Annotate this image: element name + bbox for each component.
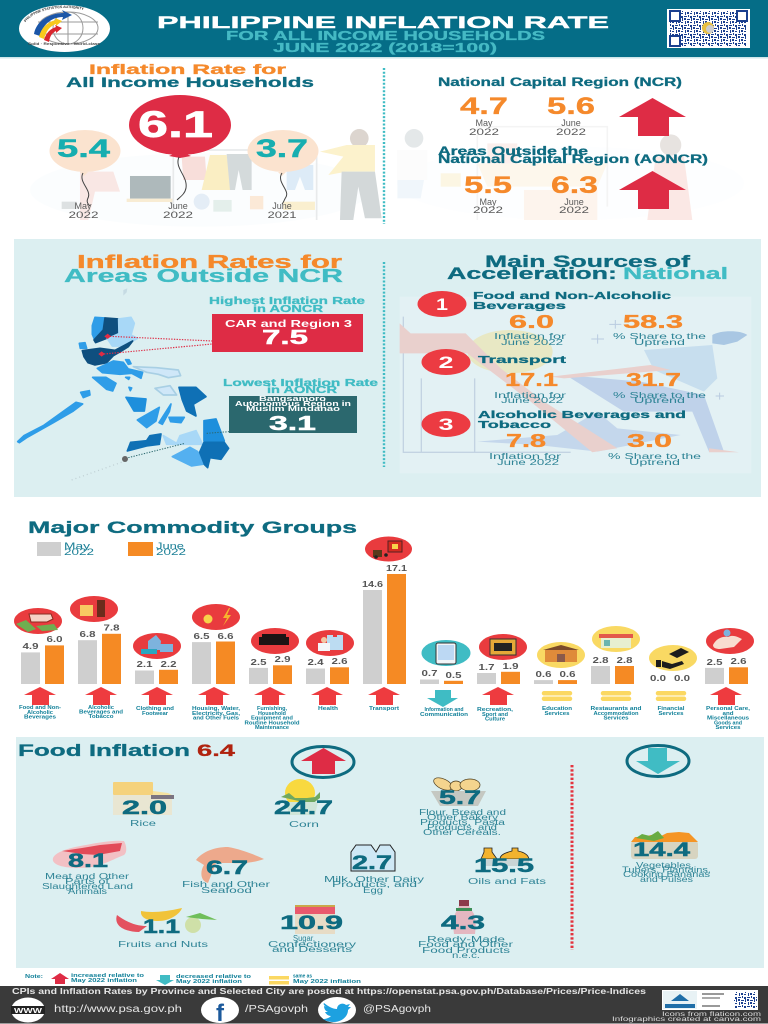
item: oils and fats: Oils and Fats: [468, 877, 546, 886]
panel: NCR and AONCR: [397, 75, 744, 220]
item: milk: Products, and: [332, 880, 417, 889]
group: furnishing: 2.5: [250, 658, 267, 667]
source 1: food: Beverages: [473, 300, 566, 312]
group: health: [306, 630, 354, 712]
source 1: food: Inflation for: [494, 332, 567, 341]
source 1: food: % Share to the: [613, 332, 707, 341]
item: sugar: and Desserts: [272, 945, 352, 954]
map of the Philippines: [18, 288, 229, 480]
group: food and non-alcoholic beverages: Alcoholic: [27, 710, 53, 716]
source 2: transport: June 2022: [501, 396, 564, 405]
group: information and communication: Communication: [420, 712, 468, 718]
group: information and communication: 0.5: [446, 671, 462, 680]
item: flour and bread: 5.7: [439, 788, 481, 809]
group: food and non-alcoholic beverages: [14, 608, 64, 720]
item: corn: [274, 779, 333, 829]
subtitle: [226, 28, 546, 55]
legend note: May 2022 inflation: [71, 978, 137, 984]
group: clothing and footwear: 2.1: [136, 660, 153, 669]
source 2: transport: Uptrend: [634, 396, 685, 405]
faded shopping illustration: [30, 129, 382, 227]
group: recreation, sport and culture: Culture: [485, 716, 505, 722]
AONCR May value: [464, 172, 512, 215]
item: oils and fats: [468, 848, 546, 886]
group: clothing and footwear: [133, 633, 181, 717]
item: ready-made food: n.e.c.: [452, 951, 480, 960]
heading: Inflation Rate for: [89, 61, 287, 77]
item: milk: Egg: [363, 886, 383, 895]
item: meat: [42, 841, 133, 896]
item: fish: Fish and Other: [182, 880, 271, 889]
heading: [66, 61, 314, 90]
source 3: alcoholic beverages: [422, 409, 702, 467]
group: transport: 14.6: [362, 580, 384, 589]
group: restaurants and accommodation: Restaurants and: [590, 706, 642, 712]
AONCR May value: May: [479, 197, 497, 207]
source 2: transport: 2: [438, 353, 454, 372]
item: fish: 6.7: [206, 858, 248, 879]
source 1: food: 58.3: [623, 312, 683, 332]
footer note: CPIs and Inflation Rates by Province and Selected City are posted at https://openstat.psa.gov.ph/Database/Prices/Price-Indices: [12, 987, 647, 996]
group: personal care: Goods and: [714, 720, 742, 726]
group: transport: 17.1: [386, 564, 408, 573]
callout: lowest inflation: [223, 377, 378, 435]
callout: lowest inflation: Autonomous Region in: [235, 401, 351, 408]
heading: main sources: Acceleration:: [447, 265, 617, 283]
item: rice: 2.0: [122, 798, 167, 819]
NCR June value: June: [561, 118, 581, 128]
item: flour and bread: Products, and: [427, 823, 497, 832]
group: health: Health: [318, 706, 338, 712]
panel: food inflation: [16, 737, 764, 968]
subtitle: JUNE 2022 (2018=100): [273, 40, 497, 55]
source 1: food: Food and Non-Alcoholic: [473, 290, 671, 302]
group: restaurants and accommodation: 2.8: [616, 656, 633, 665]
group: food and non-alcoholic beverages: Food and Non-: [19, 705, 61, 711]
item: fruits and nuts: [116, 908, 217, 949]
heading: food inflation: [18, 741, 236, 760]
legend note: Note:: [25, 974, 43, 980]
heading: All Income Households: [66, 74, 314, 90]
group: personal care: 2.5: [706, 658, 723, 667]
group: housing, water, electricity: [192, 604, 241, 722]
group: personal care: 2.6: [730, 657, 747, 666]
group: recreation, sport and culture: [477, 634, 527, 722]
source 1: food: [418, 290, 707, 347]
icon: twitter: [318, 997, 356, 1023]
heading: main sources: [447, 253, 728, 283]
group: information and communication: 0.7: [422, 669, 438, 678]
AONCR June value: 6.3: [551, 172, 598, 199]
item: meat: Meat and Other: [45, 872, 129, 881]
NCR May value: [460, 93, 508, 137]
balloon: June 2022: June: [168, 201, 188, 211]
group: information and communication: [420, 640, 470, 718]
item: flour and bread: Other Cereals.: [423, 828, 501, 837]
PSA logo: PHILIPPINE STATISTICS AUTHORITY: [24, 6, 84, 22]
group: housing, water, electricity: 6.6: [218, 632, 234, 641]
panel: all income households: [30, 61, 382, 227]
certification badge: [662, 990, 758, 1010]
callout: lowest inflation: in AONCR: [267, 384, 338, 396]
source 3: alcoholic beverages: Uptrend: [629, 458, 680, 467]
legend note: May 2022 inflation: [293, 979, 361, 985]
arrow: NCR up: [619, 98, 686, 136]
NCR May value: 2022: [469, 127, 499, 137]
source 3: alcoholic beverages: Inflation for: [489, 452, 562, 461]
NCR May value: 4.7: [460, 93, 508, 120]
icon: up arrow in circle: [292, 746, 354, 778]
icon: facebook: [201, 997, 239, 1024]
balloon: June 2022: 6.1: [138, 104, 213, 145]
item: vegetables: Cooking Bananas: [623, 870, 710, 879]
item: sugar: Confectionery: [268, 940, 356, 949]
item: ready-made food: 4.3: [441, 913, 485, 934]
group: furnishing: Furnishing,: [257, 706, 288, 712]
heading: main sources: Main Sources of: [485, 253, 691, 271]
item: flour and bread: Products, Pasta: [420, 818, 506, 827]
AONCR May value: 5.5: [464, 172, 512, 199]
group: housing, water, electricity: 6.5: [194, 632, 210, 641]
group: alcoholic beverages and tobacco: Alcoholic: [88, 705, 114, 711]
group: transport: [362, 536, 412, 712]
item: sugar: 10.9: [280, 913, 343, 934]
group: alcoholic beverages and tobacco: Beverages and: [79, 710, 123, 716]
callout: highest inflation: CAR and Region 3: [225, 318, 352, 330]
arrow: AONCR up: [619, 171, 686, 209]
footer: [0, 986, 768, 1024]
group: alcoholic beverages and tobacco: 6.8: [80, 630, 96, 639]
source 3: alcoholic beverages: June 2022: [497, 458, 560, 467]
group: health: 2.4: [308, 658, 324, 667]
group: furnishing: Equipment and: [251, 716, 293, 722]
faded market illustration: [397, 127, 744, 220]
item: vegetables: Vegetables,: [636, 861, 694, 870]
group: housing, water, electricity: Electricity, Gas,: [192, 711, 241, 717]
group: recreation, sport and culture: 1.7: [478, 663, 495, 672]
group: financial services: Financial: [658, 706, 685, 712]
group: clothing and footwear: Clothing and: [136, 706, 174, 712]
balloon: June 2021: 3.7: [256, 135, 308, 163]
source 3: alcoholic beverages: 3.0: [627, 431, 672, 451]
balloon: May 2022: 2022: [68, 210, 98, 220]
group: furnishing: Maintenance: [255, 725, 289, 731]
group: education services: [534, 642, 585, 717]
group: financial services: Services: [658, 711, 684, 717]
bar chart: commodity groups: [14, 536, 754, 731]
balloon: May 2022: May: [74, 201, 92, 211]
group: education services: Education: [542, 706, 572, 712]
item: milk: 2.7: [352, 853, 392, 874]
icon: website: WWW: [14, 1008, 43, 1015]
credits: [612, 1011, 761, 1023]
chart legend: May: [64, 541, 91, 551]
heading: food inflation: 6.4: [197, 741, 236, 760]
group: food and non-alcoholic beverages: 4.9: [22, 642, 39, 651]
group: clothing and footwear: Footwear: [142, 711, 168, 717]
group: education services: Services: [544, 711, 570, 717]
item: sugar: Sugar,: [293, 934, 315, 943]
item: vegetables: Tubers, Plantains,: [622, 866, 711, 874]
group: information and communication: Information and: [424, 707, 464, 713]
NCR June value: [547, 93, 595, 137]
group: housing, water, electricity: Housing, Water,: [192, 706, 241, 712]
heading: main sources: National: [623, 265, 728, 283]
source 2: transport: 31.7: [626, 370, 681, 390]
source 1: food: Uptrend: [634, 338, 685, 347]
item: meat: Parts of: [65, 877, 110, 886]
twitter handle: @PSAgovph: [363, 1004, 431, 1015]
group: transport: Transport: [369, 706, 399, 712]
callout: lowest inflation: Lowest Inflation Rate: [223, 377, 378, 389]
item: vegetables: [622, 831, 711, 884]
item: milk: [324, 845, 424, 895]
source 3: alcoholic beverages: % Share to the: [608, 452, 702, 461]
PSA logo: [19, 5, 110, 52]
callout: highest inflation: Highest Inflation Rate: [209, 295, 365, 307]
item: ready-made food: Food and Other: [418, 940, 514, 949]
group: alcoholic beverages and tobacco: 7.8: [104, 624, 120, 632]
group: alcoholic beverages and tobacco: Tobacco: [88, 714, 114, 720]
item: flour and bread: Other Bakery: [427, 813, 498, 822]
item: corn: Corn: [289, 820, 319, 829]
legend note: increased relative to: [71, 973, 144, 979]
callout: highest inflation: 7.5: [262, 327, 308, 349]
group: restaurants and accommodation: Services: [604, 716, 629, 722]
AONCR June value: [551, 172, 598, 215]
group: alcoholic beverages and tobacco: [70, 596, 123, 720]
group: financial services: [649, 645, 697, 717]
item: fish: [182, 847, 271, 895]
legend note: May 2022 inflation: [176, 979, 242, 985]
AONCR heading: Areas Outside the: [438, 144, 588, 158]
header banner: [0, 0, 768, 58]
item: rice: Rice: [130, 819, 157, 828]
source 3: alcoholic beverages: 3: [438, 415, 454, 434]
credits: Icons from flaticon.com: [662, 1011, 761, 1018]
balloon: June 2021: June: [272, 201, 292, 211]
group: recreation, sport and culture: Sport and: [482, 712, 508, 718]
chart legend: [37, 541, 186, 557]
AONCR June value: June: [564, 197, 584, 207]
faded runner illustration: [400, 297, 751, 473]
item: flour and bread: Flour, Bread and: [419, 808, 506, 817]
callout: lowest inflation: Muslim Mindanao: [246, 406, 340, 413]
icon: website: [11, 998, 45, 1022]
AONCR heading: National Capital Region (AONCR): [438, 152, 708, 166]
item: ready-made food: Ready-Made: [427, 935, 506, 944]
group: personal care: Personal Care,: [706, 706, 751, 712]
item: meat: 8.1: [68, 851, 109, 872]
group: recreation, sport and culture: Recreation,: [477, 707, 514, 713]
item: ready-made food: Food Products: [422, 946, 510, 955]
group: furnishing: [244, 628, 300, 731]
heading: areas outside NCR: Areas Outside NCR: [64, 266, 343, 286]
item: fruits and nuts: 1.1: [143, 917, 181, 938]
heading: major commodity groups: Major Commodity Groups: [28, 518, 357, 537]
group: personal care: Miscellaneous: [707, 716, 749, 722]
group: furnishing: 2.9: [274, 655, 291, 664]
callout: highest inflation: in AONCR: [253, 303, 324, 315]
source 1: food: 1: [436, 295, 448, 314]
heading: areas outside NCR: Inflation Rates for: [77, 252, 342, 272]
source 1: food: June 2022: [501, 338, 564, 347]
balloon: June 2022: 2022: [163, 210, 193, 220]
group: furnishing: Household: [258, 711, 286, 717]
item: rice: [113, 782, 174, 828]
facebook handle: /PSAgovph: [245, 1004, 308, 1015]
group: education services: 0.6: [560, 670, 576, 679]
group: financial services: 0.0: [650, 674, 667, 683]
balloon: June 2021: [248, 130, 318, 220]
item: meat: Animals: [68, 887, 107, 896]
item: corn: 24.7: [274, 798, 333, 819]
source 1: food: 6.0: [509, 312, 554, 332]
legend note: [25, 973, 361, 985]
source 3: alcoholic beverages: 7.8: [506, 431, 546, 451]
source 3: alcoholic beverages: Alcoholic Beverages and: [478, 409, 686, 421]
group: food and non-alcoholic beverages: Beverages: [24, 714, 56, 720]
item: oils and fats: 15.5: [474, 856, 535, 877]
chart legend: 2022: [64, 547, 94, 557]
group: financial services: 0.0: [674, 674, 691, 683]
source 2: transport: Transport: [478, 354, 567, 366]
item: ready-made food: [418, 900, 514, 960]
group: restaurants and accommodation: [590, 626, 642, 722]
callout: lowest inflation: Bangsamoro: [259, 396, 326, 403]
group: furnishing: Routine Household: [244, 720, 300, 726]
group: personal care: and: [722, 711, 734, 717]
group: education services: 0.6: [536, 670, 552, 679]
balloon: May 2022: 5.4: [57, 135, 110, 163]
item: milk: Milk, Other Dairy: [324, 875, 424, 884]
PSA logo: Solid · Responsive · World-class: [28, 42, 100, 46]
group: housing, water, electricity: and Other Fuels: [193, 716, 239, 722]
item: vegetables: and Pulses: [640, 875, 693, 884]
chart legend: 2022: [156, 547, 186, 557]
NCR June value: 2022: [556, 127, 586, 137]
source 2: transport: % Share to the: [613, 391, 707, 400]
item: flour and bread: [419, 775, 506, 837]
group: food and non-alcoholic beverages: 6.0: [46, 635, 63, 644]
AONCR June value: 2022: [559, 205, 589, 215]
NCR heading: National Capital Region (NCR): [438, 75, 682, 89]
source 2: transport: Inflation for: [494, 391, 567, 400]
QR code: [667, 9, 750, 48]
NCR May value: May: [475, 118, 493, 128]
group: clothing and footwear: 2.2: [160, 660, 177, 669]
item: fish: Seafood: [201, 886, 252, 895]
source 3: alcoholic beverages: Tobacco: [478, 419, 551, 431]
panel: areas outside NCR and main sources: [14, 239, 761, 497]
source 2: transport: 17.1: [505, 370, 558, 390]
callout: lowest inflation: 3.1: [269, 413, 316, 435]
item: meat: Slaughtered Land: [42, 882, 133, 891]
group: recreation, sport and culture: 1.9: [502, 662, 519, 671]
legend note: same as: [293, 974, 312, 980]
website address: http://www.psa.gov.ph: [54, 1004, 182, 1015]
chart legend: June: [156, 541, 184, 551]
group: restaurants and accommodation: Accommodation: [594, 711, 638, 717]
credits: Infographics created at canva.com: [612, 1016, 761, 1023]
NCR June value: 5.6: [547, 93, 595, 120]
legend note: decreased relative to: [176, 974, 251, 980]
item: fruits and nuts: Fruits and Nuts: [118, 940, 208, 949]
heading: areas outside NCR: [64, 252, 343, 286]
item: sugar: [268, 905, 356, 954]
main title: PHILIPPINE INFLATION RATE: [157, 13, 609, 32]
source 2: transport: [422, 349, 707, 405]
AONCR May value: 2022: [473, 205, 503, 215]
AONCR heading: [438, 144, 708, 166]
icon: down arrow in circle: [627, 746, 689, 776]
callout: highest inflation: [209, 295, 365, 352]
group: restaurants and accommodation: 2.8: [592, 656, 609, 665]
group: personal care: [705, 628, 754, 731]
balloon: June 2022: [129, 95, 231, 220]
group: personal care: Services: [716, 725, 741, 731]
item: vegetables: 14.4: [633, 840, 691, 861]
heading: food inflation: Food Inflation: [18, 741, 190, 760]
balloon: May 2022: [50, 130, 120, 220]
balloon: June 2021: 2021: [268, 210, 296, 220]
group: health: 2.6: [332, 657, 348, 666]
subtitle: FOR ALL INCOME HOUSEHOLDS: [226, 28, 546, 43]
